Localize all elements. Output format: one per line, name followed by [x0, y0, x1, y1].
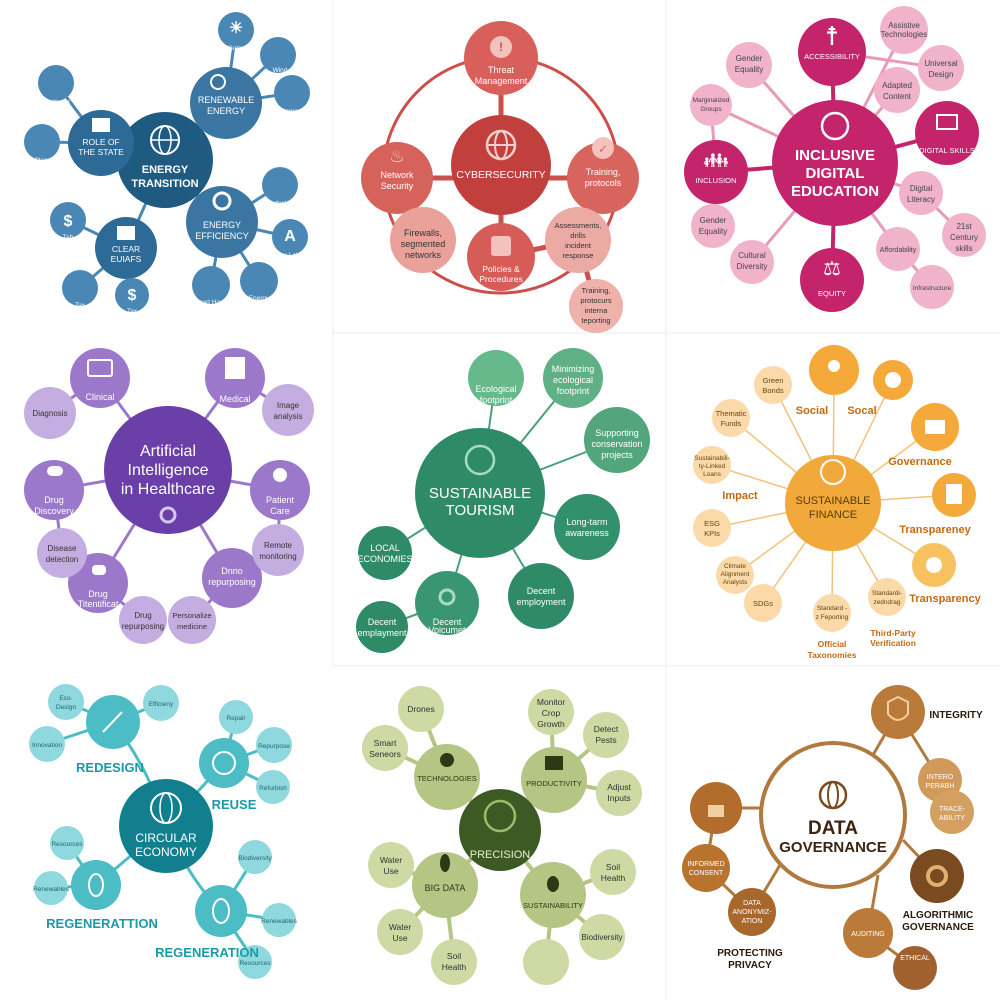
nodes: tourism: ecological [553, 375, 593, 385]
leaves: ai: Diagnosis [32, 409, 68, 418]
node: equity [800, 248, 864, 312]
leaves: pink: Design [929, 70, 953, 79]
labels: governance: ALGORITHMIC [903, 910, 973, 921]
leaves: energy: Solar [228, 45, 244, 52]
node: ai center: Artificial [140, 443, 196, 460]
leaves: pink: 21st [956, 222, 972, 231]
leaves: energy: Labeling [247, 303, 272, 310]
leaves: finance: zedndrag [873, 599, 901, 606]
node: ai center: Intelligence [128, 462, 209, 479]
nodes: tourism: ECONOMIES [357, 554, 413, 564]
leaves: pink: Cultural [738, 251, 766, 260]
panel: inclusive digital education [684, 6, 986, 312]
node: digital skills [915, 101, 979, 165]
node: finance center: FINANCE [809, 509, 857, 521]
leaves: circular: Resources [239, 960, 271, 967]
node: training reporting: protocurs [580, 296, 612, 305]
leaves: energy: Energy [249, 295, 270, 302]
leaves: ai: Disease [48, 544, 77, 553]
leaves: circular: Refurbish [259, 785, 287, 792]
labels: finance: Social [796, 405, 828, 417]
nodes: tourism: LOCAL [370, 543, 400, 553]
mid nodes: ai: Drug [44, 495, 64, 505]
labels: circular: REDESIGN [76, 760, 144, 775]
leaves: precision: Adjust [607, 782, 631, 792]
nodes: governance: TRACE- [939, 806, 966, 813]
leaves: energy: Appliances [266, 208, 299, 215]
leaves: energy: Tab [63, 234, 74, 241]
leaves: precision [362, 686, 642, 985]
node: renewable energy: ENERGY [207, 106, 245, 116]
node: policies [467, 223, 535, 291]
node: equity: ⚖ [823, 258, 841, 280]
leaves: finance: Alignment [721, 571, 750, 578]
leaves: pink: Digital [910, 184, 932, 193]
labels: governance: GOVERNANCE [902, 922, 974, 933]
labels: finance: Taxonomies [808, 650, 857, 660]
node: accessibility: ☨ [825, 21, 839, 51]
node: energy transition center: ENERGY [142, 164, 189, 176]
mid nodes: ai: Medical [219, 394, 251, 404]
node: firewalls [390, 207, 456, 273]
leaves: energy: Sussrdies [42, 107, 71, 114]
leaves: finance: Climate [724, 563, 746, 570]
labels: finance: Transpareney [899, 524, 972, 536]
panel: cybersecurity [361, 21, 639, 333]
leaves: finance: ESG [704, 519, 720, 528]
mid nodes: ai: Titentificat [78, 599, 119, 609]
leaves: precision: Use [392, 933, 408, 943]
node: ai center [104, 406, 232, 534]
node: circular economy center [119, 779, 213, 873]
leaves: ai: Personalize [172, 611, 212, 620]
nodes: governance: ANONYMIZ- [732, 909, 772, 916]
leaves: precision: Pests [595, 735, 617, 745]
labels: finance: Verification [870, 638, 916, 648]
node: inclusive digital education center: DIGITAL [806, 165, 864, 182]
labels: governance: PROTECTING [717, 948, 783, 959]
node: data governance ring: DATA [808, 818, 858, 839]
node: training protocols: protocols [585, 178, 622, 188]
leaves: finance: SDGs [753, 599, 773, 608]
node: energy transition center: TRANSITION [131, 178, 199, 190]
nodes: tourism: awareness [565, 528, 609, 538]
labels: finance: Third-Party [870, 628, 916, 638]
labels: governance [717, 710, 983, 971]
leaves: pink: Content [883, 92, 912, 101]
node: renewable energy: RENEWABLE [198, 95, 254, 105]
leaves: circular: Renewables [261, 918, 298, 925]
leaves: pink: Marginalized [693, 97, 730, 104]
node: training reporting [569, 279, 623, 333]
leaves: pink: Gender [736, 54, 763, 63]
mid nodes: ai: Dnno [221, 566, 243, 576]
node: policies: Procedures [479, 274, 523, 284]
node: assessments: incident [565, 241, 592, 250]
node: data governance ring [761, 743, 905, 887]
node: firewalls: segmented [401, 239, 445, 249]
mid nodes: precision: TECHNOLOGIES [417, 774, 477, 783]
mid nodes: ai: Patient [266, 495, 295, 505]
leaves: precision: Water [389, 922, 411, 932]
leaves: ai: repurposing [122, 622, 164, 631]
node: policies: Policies & [482, 264, 520, 274]
nodes: tourism: Ecological [475, 384, 517, 394]
node: inclusive digital education center: INCLUSIVE [795, 147, 875, 164]
leaves: circular [29, 684, 298, 979]
node: clear euiafs: CLEAR [112, 244, 140, 254]
leaves: energy: Wind [273, 67, 288, 74]
node: energy transition center [117, 112, 213, 208]
node: network security [361, 142, 433, 214]
leaves: pink: Affordability [880, 247, 917, 254]
node: tourism center: TOURISM [446, 502, 514, 519]
nodes: tourism: Long-tarm [566, 517, 608, 527]
leaves: energy: Frameworks [62, 310, 99, 317]
node: training reporting: Training, [582, 286, 610, 295]
nodes: governance: ETHICAL [900, 955, 930, 962]
nodes: governance [682, 685, 974, 990]
labels: finance: Governance [888, 456, 952, 468]
leaves: precision: Soil [606, 862, 620, 872]
node: energy efficiency [186, 186, 258, 258]
node: precision center: PRECISION [470, 849, 530, 861]
nodes: tourism: footprint [557, 386, 590, 396]
node: training protocols: Training, [586, 167, 620, 177]
labels: circular: REGENERATTION [46, 916, 158, 931]
nodes: governance: DATA [743, 900, 761, 907]
leaves: pink: Equality [735, 65, 763, 74]
leaves: finance: Green [763, 376, 783, 385]
leaves: circular: Repurpose [258, 743, 290, 750]
node: tourism center [415, 428, 545, 558]
labels: circular: REUSE [212, 797, 257, 812]
leaves: finance: Bonds [762, 386, 784, 395]
leaves: finance: ty-Linked [699, 463, 726, 470]
nodes: tourism: emplayment [357, 628, 407, 638]
nodes: tourism: conservation [591, 439, 643, 449]
mid nodes: ai: Discovery [34, 506, 74, 516]
leaves: precision: Growth [537, 719, 565, 729]
leaves: ai: Remote [264, 541, 293, 550]
leaves: energy: Biomass [280, 108, 305, 115]
leaves: energy: ☀ [229, 20, 243, 37]
nodes: tourism [356, 348, 650, 653]
leaves: energy: Frameworks [50, 242, 87, 249]
nodes: tourism: Voicumet [428, 625, 466, 635]
leaves: finance [693, 366, 906, 632]
labels: finance: Impact [722, 490, 758, 502]
leaves: precision: Health [601, 873, 626, 883]
mid nodes: ai [24, 348, 310, 613]
leaves: finance: Funds [721, 419, 742, 428]
panel: precision agriculture [362, 686, 642, 985]
nodes: tourism: Minimizing [552, 364, 594, 374]
leaves: finance: Analysts [723, 579, 748, 586]
node: cybersecurity center: CYBERSECURITY [456, 169, 546, 181]
node: network security: ♨ [389, 146, 405, 166]
leaves: energy: $ [128, 287, 137, 304]
leaves: energy: Regulations [25, 165, 60, 172]
mid nodes: circular [71, 695, 249, 937]
leaves: energy [24, 12, 314, 317]
leaves: ai: detection [46, 555, 78, 564]
nodes: governance: ATION [742, 918, 762, 925]
leaves: energy: A [284, 228, 296, 245]
leaves: pink: Adapted [882, 81, 912, 90]
panel: sustainable tourism [356, 348, 650, 653]
node: energy efficiency: EFFICIENCY [195, 231, 249, 241]
mid nodes: ai: repurposing [208, 577, 256, 587]
node: digital skills: DIGITAL SKILLS [919, 146, 975, 155]
leaves: energy: $ [64, 213, 73, 230]
leaves: pink: Infrastructure [913, 285, 952, 292]
panel: sustainable finance [693, 345, 982, 660]
leaves: energy: Energy Labeling [267, 252, 314, 259]
leaves: energy: Ecodesigned [263, 200, 301, 207]
nodes: governance: AUDITING [851, 931, 885, 938]
leaves: circular: Innovation [32, 742, 62, 749]
leaves: pink [690, 6, 986, 309]
leaves: pink: Century [950, 233, 978, 242]
panel: data governance [682, 685, 983, 990]
node: finance center: SUSTAINABLE [796, 495, 870, 507]
nodes: governance: PERABH [926, 783, 954, 790]
node: tourism center: SUSTAINABLE [429, 485, 531, 502]
leaves: precision: Seneors [369, 749, 401, 759]
nodes: governance: INTERO [927, 774, 954, 781]
node: ai center: in Healthcare [121, 481, 215, 498]
node: network security: Security [381, 181, 414, 191]
leaves: finance: Sustainabili- [694, 455, 730, 462]
node: training reporting: interna [585, 306, 608, 315]
leaves: pink: Technologies [881, 30, 927, 39]
leaves: finance: Thematic [716, 409, 747, 418]
labels: finance: Official [818, 639, 846, 649]
labels: circular [46, 760, 259, 960]
node: threat management: Management [475, 76, 528, 86]
leaves: pink: Gender [700, 216, 727, 225]
node: training reporting: teporting [581, 316, 611, 325]
node: assessments: Assessments, [555, 221, 601, 230]
leaves: energy: Systems [199, 307, 224, 314]
mid nodes: precision: PRODUCTIVITY [526, 779, 582, 788]
leaves: precision: Biodiversity [582, 933, 622, 942]
node: inclusive digital education center [772, 100, 898, 226]
leaves: precision: Use [383, 866, 399, 876]
nodes: tourism: Decent [433, 617, 462, 627]
labels: finance: Socal [847, 405, 877, 417]
leaves: energy: Smart Home [193, 299, 230, 306]
nodes: tourism: Supporting [595, 428, 639, 438]
leaves: energy: Intelligent [42, 99, 70, 106]
leaves: ai: analysis [274, 412, 302, 421]
nodes: tourism: Decent [368, 617, 397, 627]
node: threat management: ! [499, 40, 503, 54]
node: finance center [785, 455, 881, 551]
node: accessibility [798, 18, 866, 86]
mid nodes: precision [412, 744, 587, 928]
node: cybersecurity center [451, 115, 551, 215]
leaves: pink: Universal [924, 59, 958, 68]
mid nodes: precision: SUSTAINABILITY [523, 901, 583, 910]
node: role of the state: ROLE OF [82, 137, 120, 147]
panel: ai in healthcare [24, 348, 314, 644]
leaves: precision: Monitor [537, 697, 565, 707]
nodes: tourism: employment [516, 597, 566, 607]
node: inclusion: INCLUSION [696, 176, 736, 185]
labels: finance [722, 405, 982, 660]
node: assessments: response [563, 251, 593, 260]
leaves: precision: Health [442, 962, 467, 972]
leaves: energy: Tax [75, 302, 86, 309]
node: role of the state [68, 110, 134, 176]
mid nodes: ai: Clinical [85, 392, 115, 402]
leaves: circular: Design [56, 704, 77, 711]
leaves: energy: Clear [34, 157, 51, 164]
leaves: ai: Drug [134, 611, 152, 620]
node: threat management: Threat [488, 65, 515, 75]
nodes: tourism: footprint [480, 395, 513, 405]
node: inclusion [684, 140, 748, 204]
leaves: precision: Water [380, 855, 402, 865]
leaves: precision: Inputs [607, 793, 631, 803]
node: circular economy center: CIRCULAR [135, 831, 197, 845]
node: threat management [464, 21, 538, 95]
leaves: pink: Diversity [737, 262, 767, 271]
node: precision center [459, 789, 541, 871]
nodes: governance: INFORMED [687, 861, 725, 868]
labels: finance: Transparency [909, 593, 982, 605]
node: assessments [545, 207, 611, 273]
mid nodes: ai: Care [270, 506, 290, 516]
node: inclusive digital education center: EDUCATION [791, 183, 879, 200]
panel: circular economy [29, 684, 298, 979]
node: data governance ring: GOVERNANCE [779, 839, 887, 856]
leaves: finance: Standardi- [872, 590, 902, 597]
node: network security: Network [380, 170, 414, 180]
node: training protocols: ✓ [598, 142, 608, 156]
nodes: tourism: projects [601, 450, 633, 460]
leaves: ai: medicine [177, 622, 207, 631]
leaves: pink: Groups [700, 106, 722, 113]
leaves: finance: Loans [703, 471, 722, 478]
leaves: circular: Eco- [59, 695, 73, 702]
leaves: precision: Drones [407, 704, 435, 714]
leaves: precision: Smart [374, 738, 397, 748]
node: clear euiafs [95, 217, 157, 279]
leaves: pink: skills [955, 244, 973, 253]
leaves: energy: Tax [127, 308, 138, 315]
leaves: circular: Renewables [33, 886, 70, 893]
leaves: ai: Image [277, 401, 300, 410]
node: renewable energy [190, 67, 262, 139]
icon nodes: finance [809, 345, 976, 587]
node: training protocols [567, 137, 639, 214]
leaves: circular: Resources [51, 841, 83, 848]
node: firewalls: Firewalls, [404, 228, 442, 238]
leaves: finance: z Feporting [816, 614, 849, 621]
leaves: ai: monitoring [259, 552, 297, 561]
node: accessibility: ACCESSIBILITY [804, 52, 860, 61]
leaves: circular: Biodiversity [238, 855, 272, 862]
node: circular economy center: ECONOMY [135, 845, 197, 859]
leaves: precision: Detect [594, 724, 619, 734]
nodes: governance: CONSENT [689, 870, 724, 877]
panel: energy transition [24, 12, 314, 317]
leaves: pink: Literacy [907, 195, 935, 204]
leaves: pink: Equality [699, 227, 727, 236]
node: assessments: drills [570, 231, 586, 240]
nodes: governance: ABILITY [939, 815, 965, 822]
node: energy efficiency: ENERGY [203, 220, 241, 230]
leaves: finance: Standard - [817, 605, 847, 612]
node: equity: EQUITY [818, 289, 846, 298]
node: role of the state: THE STATE [78, 147, 124, 157]
leaves: ai [24, 384, 314, 644]
leaves: circular: Efficieny [149, 701, 174, 708]
leaves: finance: KPIs [704, 529, 720, 538]
node: inclusion: 👪︎ [703, 150, 729, 172]
labels: governance: PRIVACY [728, 960, 772, 971]
leaves: precision: Soil [447, 951, 461, 961]
leaves: precision: Crop [542, 708, 560, 718]
leaves: circular: Repair [226, 715, 246, 722]
node: clear euiafs: EUIAFS [111, 254, 142, 264]
labels: governance: INTEGRITY [929, 710, 983, 721]
nodes: tourism: Decent [527, 586, 556, 596]
labels: circular: REGENERATION [155, 945, 259, 960]
node: firewalls: networks [405, 250, 442, 260]
leaves: pink: Assistive [888, 21, 920, 30]
mid nodes: precision: BIG DATA [425, 883, 465, 893]
mid nodes: ai: Drug [88, 589, 108, 599]
